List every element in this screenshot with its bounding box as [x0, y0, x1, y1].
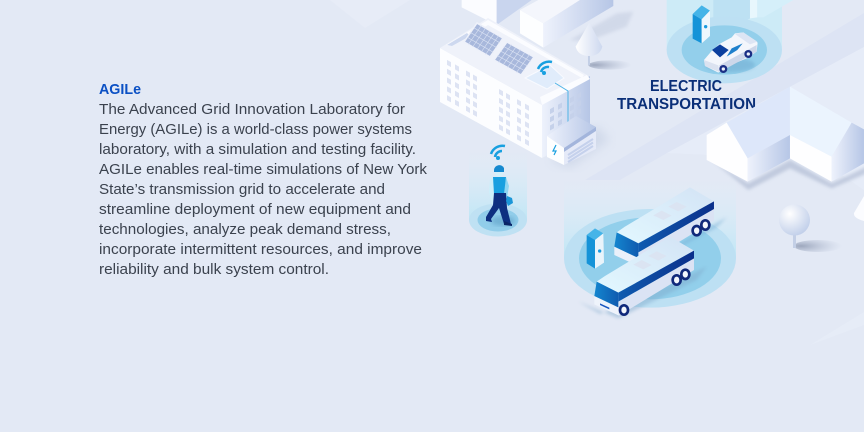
heading: AGILe: AGILe — [99, 82, 141, 98]
house 2 roof — [790, 87, 852, 157]
label line 1: ELECTRIC — [650, 78, 722, 95]
platform outer — [667, 17, 782, 83]
platform outer — [564, 209, 736, 308]
house shadows — [713, 160, 864, 190]
body line 1: The Advanced Grid Innovation Laboratory for — [99, 102, 405, 118]
house 1 roof — [727, 87, 790, 158]
house 2 front — [790, 135, 832, 182]
road bands — [330, 0, 864, 345]
charger — [693, 5, 710, 43]
car — [704, 32, 758, 73]
background block light — [757, 0, 793, 17]
tree: right edge cone — [854, 196, 864, 221]
body line 2: Energy (AGILe) is a world-class power systems — [99, 122, 412, 138]
worker figure — [486, 165, 515, 226]
person with wifi — [469, 146, 527, 236]
roof front lip — [540, 75, 590, 105]
background block — [713, 0, 750, 35]
charger — [587, 228, 604, 269]
icon: wifi on roof — [538, 62, 552, 75]
label: electric transportation — [617, 78, 756, 113]
platform inner — [682, 25, 767, 75]
electric car station — [667, 0, 793, 83]
building right face — [542, 76, 590, 158]
body line 3: laboratory, with a simulation and testing facility. — [99, 142, 416, 158]
bus station — [564, 178, 736, 318]
house 1 side — [748, 135, 790, 182]
building left face — [440, 48, 542, 158]
solar panel 2 — [494, 42, 534, 75]
platform inner — [579, 217, 721, 299]
top background buildings — [462, 0, 633, 48]
tree: cone — [576, 23, 632, 70]
beam — [667, 0, 782, 50]
body line 7: technologies, analyze peak demand stress, — [99, 222, 391, 238]
roof parapet — [446, 20, 584, 78]
roof antenna panel — [525, 65, 564, 89]
roof left strip — [447, 33, 470, 46]
beam — [564, 178, 736, 258]
background block strip — [750, 0, 757, 18]
body line 4: AGILe enables real-time simulations of New York — [99, 162, 428, 178]
platform outer — [469, 204, 527, 236]
roof — [440, 18, 587, 105]
blue cable — [555, 83, 568, 122]
house 1 front — [707, 123, 748, 182]
building shadow — [550, 125, 610, 168]
intro text block — [99, 82, 428, 278]
building: AGILe laboratory — [440, 18, 610, 168]
house 2 side — [832, 123, 864, 182]
right face windows — [552, 93, 579, 130]
tree: ball — [779, 204, 842, 252]
body line 5: State’s transmission grid to accelerate and — [99, 182, 385, 198]
icon: wifi on person — [491, 146, 505, 160]
bus front — [578, 237, 707, 318]
body line 6: streamline deployment of new equipment and — [99, 202, 411, 218]
body line 9: reliability and bulk system control. — [99, 262, 329, 278]
label line 2: TRANSPORTATION — [617, 96, 756, 113]
person light beam — [469, 150, 527, 220]
solar panel 1 — [464, 23, 503, 57]
bus back — [614, 187, 727, 269]
utility box — [547, 116, 596, 165]
houses — [707, 87, 864, 190]
left face windows — [449, 61, 527, 147]
body line 8: incorporate intermittent resources, and improve — [99, 242, 422, 258]
platform inner — [478, 208, 518, 232]
